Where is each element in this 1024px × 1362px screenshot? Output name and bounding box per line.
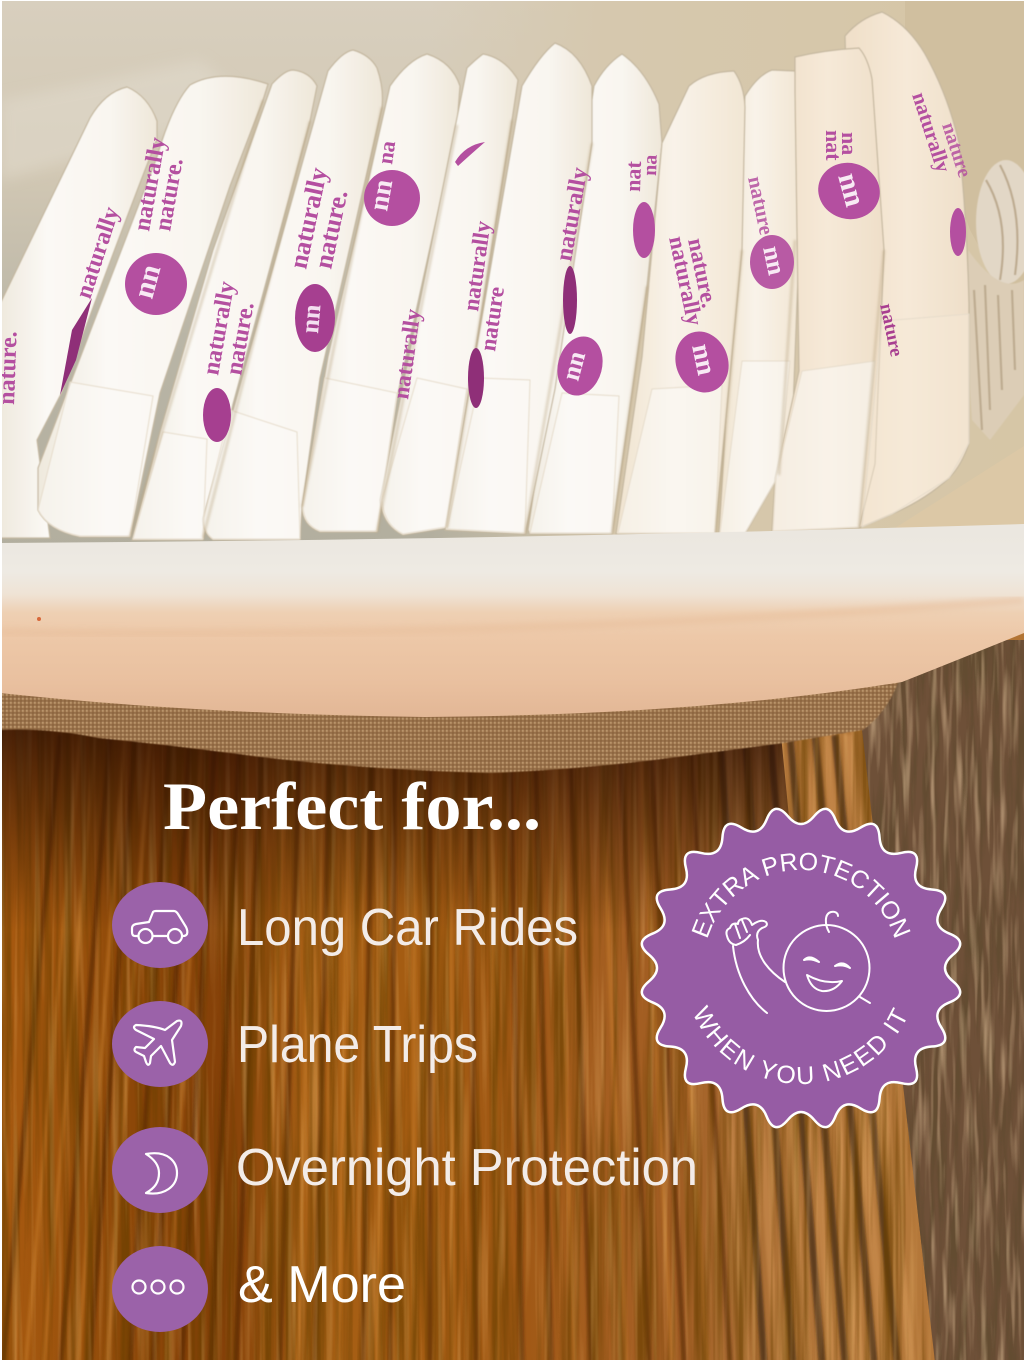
photo: pad brand logos and wordmarks: nn [831,169,872,210]
photo: pad brand logos and wordmarks: naturally [284,165,333,271]
photo: row of wrapped pads [0,12,969,540]
pad 1 [0,87,157,538]
pad 3 [132,70,317,540]
badge bottom text: WHEN YOU NEED IT [694,1004,906,1084]
label: Plane Trips [237,1016,478,1074]
photo: pad brand logos and wordmarks: nn [685,341,722,378]
photo: pad brand logos and wordmarks: nature. [309,187,353,271]
photo: pad brand logos and wordmarks: naturally [198,279,240,377]
pad 11 [772,48,884,532]
photo: pad brand logos and wordmarks: nature [875,302,907,358]
pad 7 [445,43,592,534]
photo: pad brand logos and wordmarks: naturally [551,165,593,263]
photo: pad brand logos and wordmarks: nat [821,130,846,161]
photo: pad brand logos and wordmarks: naturally [458,219,496,313]
pad 12 [845,12,969,528]
photo: pad brand logos and wordmarks: nn [363,177,399,213]
wood floor background [0,630,1024,1362]
photo: pad brand logos and wordmarks: nature [475,285,509,353]
photo: pad brand logos and wordmarks: nature [937,120,976,180]
photo: pad shadows between wraps [130,100,884,538]
photo: pad brand logos and wordmarks: naturally [71,204,125,302]
photo: pad brand logos and wordmarks: nature [743,174,779,237]
photo: pad brand logos and wordmarks: naturally [664,234,708,328]
icon: smiling baby with thumbs up [726,912,870,1013]
label: Overnight Protection [236,1139,698,1197]
basket fabric liner and rim [0,524,1024,717]
photo: pad brand logos and wordmarks [0,89,976,442]
list item: overnight protection [112,1127,698,1213]
photo: pad brand logos and wordmarks: nature. [683,236,722,310]
icon: car [112,882,208,968]
photo: pad brand logos and wordmarks: naturally [129,135,171,233]
photo: pad brand logos and wordmarks: na [837,132,862,155]
photo: pad brand logos and wordmarks: nature. [150,156,189,233]
badge: extra protection [640,808,962,1128]
pad 10 [719,70,799,534]
label: Long Car Rides [237,899,578,957]
icon: three dots [112,1246,208,1332]
list item: plane trips [112,1001,478,1087]
photo: pad brand logos and wordmarks: nn [556,348,591,384]
badge top text: EXTRA PROTECTION [692,852,910,938]
photo: pad brand logos and wordmarks: nature. [221,300,260,377]
list item: long car rides [112,882,578,968]
pad 4 [203,50,382,540]
pad 5 [302,54,460,532]
pad 2 [38,76,268,537]
pad 9 [616,71,745,534]
photo: pad absorbent ends and seams [38,314,969,539]
pad 8 [528,54,662,534]
photo: pad brand logos and wordmarks: nn [757,243,792,278]
basket burlap edge [0,672,902,773]
badge scalloped seal [642,809,960,1127]
label: & More [238,1256,406,1314]
pad 6 [380,54,518,535]
photo: pad brand logos and wordmarks: naturally [907,89,956,176]
photo: pad brand logos and wordmarks: na [372,139,400,166]
photo: basket interior wall [0,0,1024,560]
photo: pad brand logos and wordmarks: nn [295,303,327,335]
photo: pad brand logos and wordmarks: naturally [388,307,426,401]
icon: moon [112,1127,208,1213]
photo: pad brand logos and wordmarks: nn [127,261,167,302]
list item: and more [112,1246,406,1332]
photo: cotton yarn and tassel [966,160,1024,440]
heading: Perfect for... [163,768,541,844]
photo: pad brand logos and wordmarks: na [639,154,662,176]
icon: plane [112,1001,208,1087]
photo: pad brand logos and wordmarks: nat [620,160,646,192]
